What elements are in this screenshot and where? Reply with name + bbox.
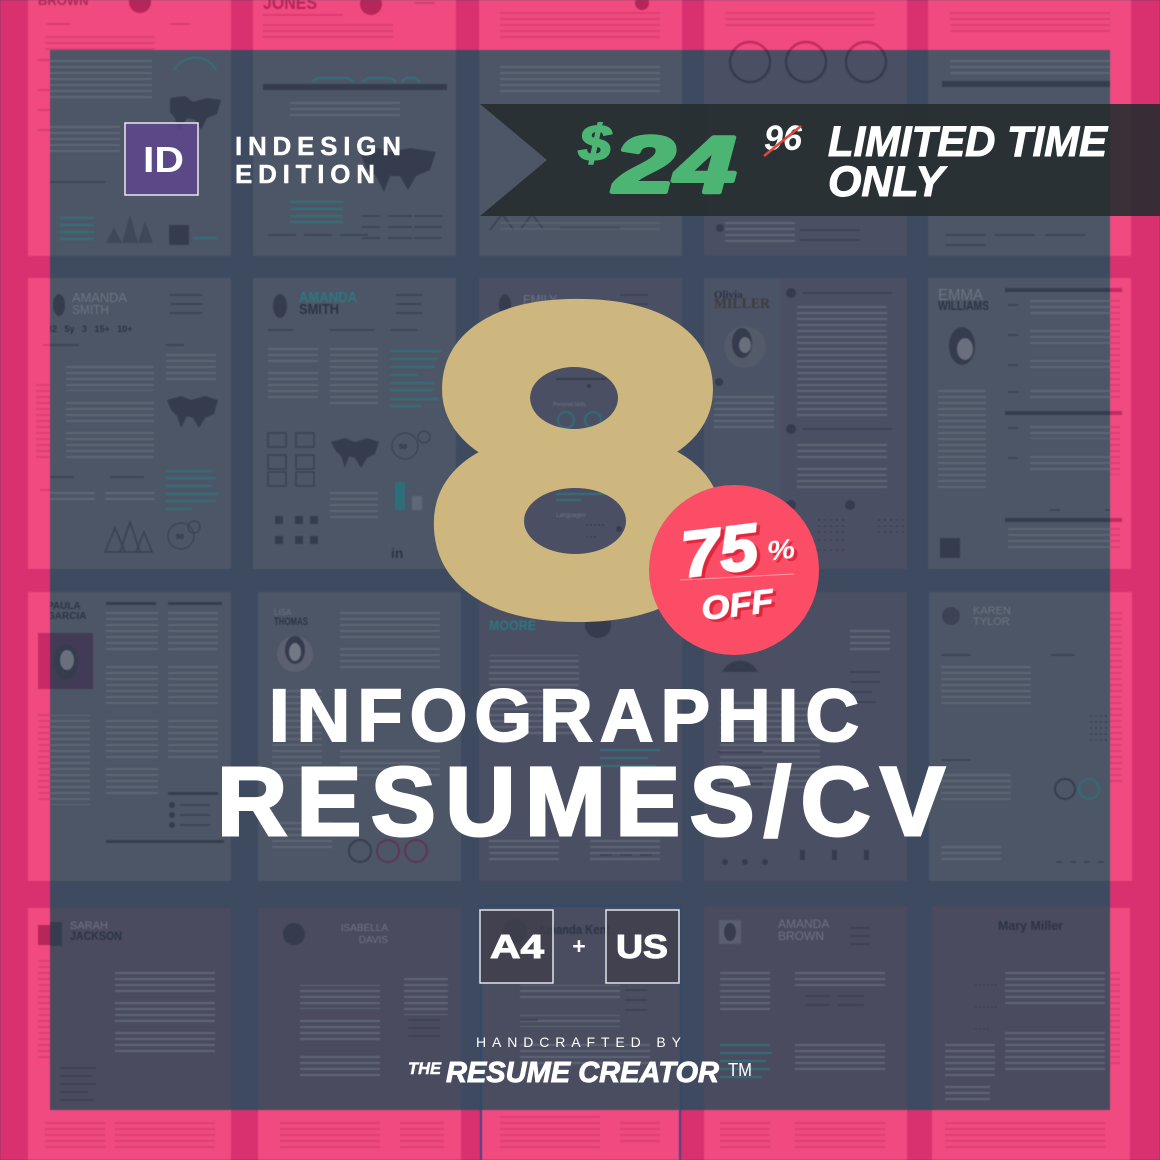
- ribbon shape: [480, 104, 1160, 216]
- resume: Isabella Davis: [258, 908, 461, 1160]
- resume: timeline: [928, 0, 1131, 256]
- InDesign badge: [125, 123, 401, 195]
- resume: Brown: [28, 0, 231, 256]
- format: A4: [480, 910, 553, 983]
- brand name: THE: [408, 1059, 442, 1078]
- title: [217, 674, 945, 856]
- resume: Amanda Smith teal: 50: [399, 444, 407, 451]
- resume: Sarah Jackson: SARAH: [70, 920, 108, 932]
- ID box: ID: [143, 139, 184, 180]
- resume: Amanda Smith grey: AMANDA: [72, 290, 127, 305]
- resume: Sarah Jackson: [28, 908, 231, 1160]
- resume: Mary Miller: Mary Miller: [998, 918, 1063, 933]
- resume: Jones: [253, 0, 456, 256]
- resume: Isabella Davis: DAVIS: [359, 935, 388, 946]
- discount text: [677, 506, 803, 629]
- resume row 4: [28, 906, 1130, 1160]
- badge circle: [649, 485, 819, 655]
- paper formats: [480, 910, 679, 983]
- resume: Moore: MOORE: [489, 617, 536, 633]
- resume: Isabella Davis: ISABELLA: [341, 923, 388, 934]
- format: US: [606, 910, 679, 983]
- resume: Paula Garcia: [28, 592, 231, 881]
- format: US: US: [616, 928, 668, 965]
- price: $24: 24: [611, 120, 736, 209]
- resume: Lisa Thomas: [258, 592, 461, 881]
- badge divider: [680, 574, 794, 580]
- resume row 3: [28, 592, 1132, 881]
- resume: Amanda Kent: [481, 906, 681, 1160]
- resume: Mary Miller: [932, 906, 1130, 1160]
- pink margin: right: [1110, 50, 1160, 1110]
- discount text: 75: [677, 510, 763, 591]
- resume: Karen Tylor: TYLOR: [973, 616, 1010, 628]
- resume: Karen Tylor: KAREN: [973, 605, 1011, 617]
- brand name: RESUME CREATOR: [446, 1057, 719, 1089]
- title: INFOGRAPHIC: [269, 674, 859, 757]
- edition label: INDESIGN: [235, 131, 401, 161]
- limited time only: LIMITED TIME: [828, 118, 1108, 166]
- resume: Emma Williams: [928, 278, 1131, 569]
- resume: Amanda Smith grey: 32 5y 3 15+ 10+: [47, 324, 133, 334]
- resume: Amanda Smith grey: 50: [176, 534, 184, 541]
- big number 8: 8: [436, 229, 719, 691]
- resume: Amanda Smith teal: in: [391, 545, 403, 561]
- edition label: [235, 131, 401, 189]
- resume: Emily: [479, 278, 682, 569]
- discount badge: [649, 485, 819, 655]
- edition label: EDITION: [235, 159, 375, 189]
- old price: 96 struck through: 96: [764, 119, 803, 158]
- resume: Olivia Miller: MILLER: [714, 296, 770, 312]
- resume: Amanda Smith teal: SMITH: [299, 302, 339, 318]
- credit: [408, 1034, 752, 1089]
- price: $24: [578, 115, 736, 209]
- price ribbon: [480, 104, 1160, 216]
- resume: Olivia Miller: Olivia: [714, 289, 743, 301]
- resume: Amanda Smith teal: [253, 278, 456, 569]
- resume: Karen Tylor: [929, 592, 1132, 881]
- resume: Amanda Brown: [704, 906, 907, 1160]
- resume: Olivia Miller: [704, 278, 908, 569]
- resume: skills bars: [704, 592, 907, 881]
- resume row 1: [28, 0, 1131, 256]
- resume row 2: [28, 278, 1131, 569]
- resume: Lisa Thomas: THOMAS: [274, 616, 308, 628]
- resume: Lisa Thomas: LISA: [274, 608, 292, 617]
- pink margin: bottom: [0, 1110, 1160, 1160]
- resume: Paula Garcia: GARCIA: [47, 611, 86, 622]
- pink margin: top: [0, 0, 1160, 51]
- resume: Amanda Smith grey: [28, 278, 231, 569]
- plus sign: +: [572, 933, 586, 959]
- resume: Emily: EMILY: [523, 292, 557, 309]
- discount text: OFF: [699, 582, 777, 627]
- handcrafted by: HANDCRAFTED BY: [476, 1034, 682, 1050]
- resume: Emma Williams: WILLIAMS: [938, 298, 989, 313]
- pink margin: left: [0, 50, 50, 1110]
- discount text: %: [765, 533, 797, 567]
- limited time only: [828, 118, 1108, 206]
- resume: Sarah Jackson: JACKSON: [70, 929, 122, 943]
- resume: Amanda Brown: AMANDA: [778, 917, 829, 931]
- resume: Paula Garcia: PAULA: [47, 601, 81, 612]
- resume: Amanda Smith grey: SMITH: [72, 302, 109, 317]
- price: $24: $: [578, 115, 612, 171]
- resume: Emily: Personal Skills: [553, 402, 586, 408]
- resume: Moore: [479, 592, 682, 881]
- limited time only: ONLY: [828, 158, 947, 206]
- title: RESUMES/CV: [217, 747, 945, 856]
- resume: Amanda Kent: Amanda Kent: [538, 922, 611, 937]
- resume: three rings: [704, 0, 907, 256]
- resume: Amanda Smith teal: AMANDA: [299, 290, 357, 306]
- resume: top center: [479, 0, 682, 256]
- resume: Amanda Brown: BROWN: [778, 929, 824, 943]
- resume: Emily: Languages: [556, 513, 586, 519]
- brand name: TM: [728, 1060, 752, 1080]
- format: A4: A4: [490, 928, 545, 965]
- resume: Emma Williams: EMMA: [938, 287, 983, 304]
- ID box: [125, 123, 198, 195]
